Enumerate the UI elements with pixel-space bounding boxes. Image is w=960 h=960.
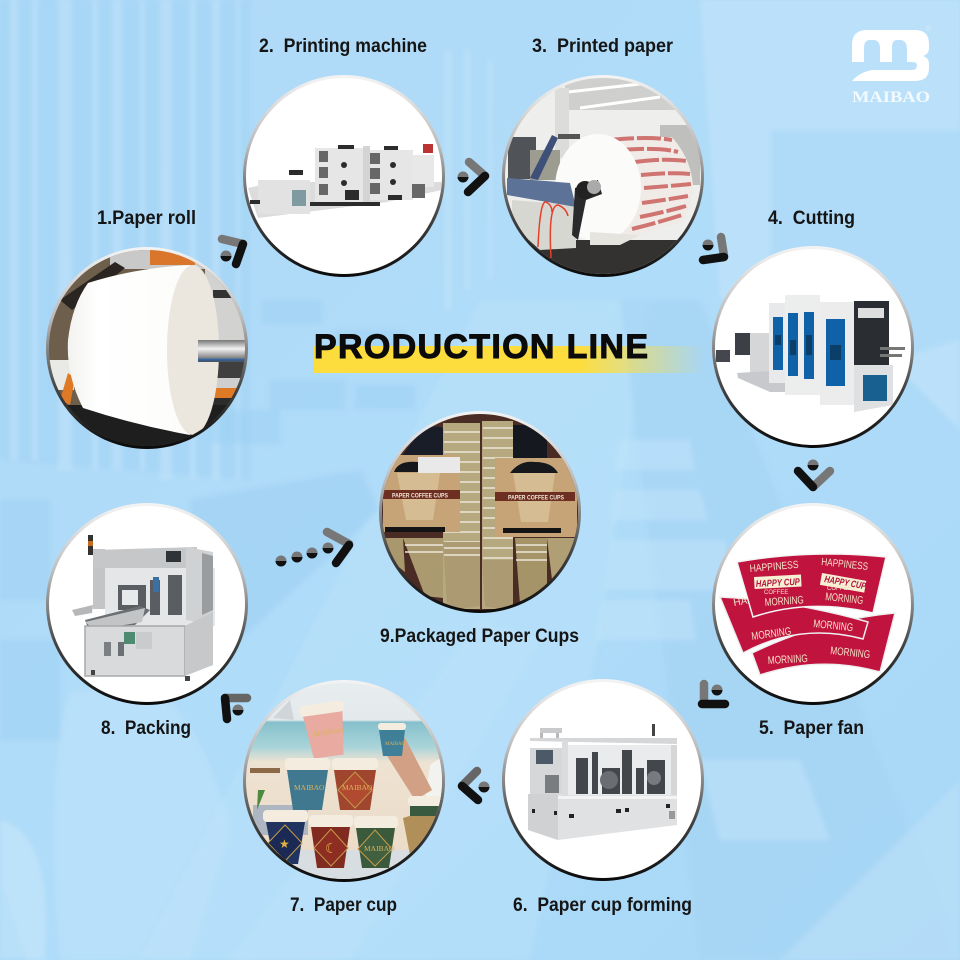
step 9: packaged paper cups — [378, 410, 582, 647]
step 5: paper fan: HAPPINESS — [749, 559, 799, 575]
step 2: printing machine: 2. Printing machine — [259, 36, 427, 57]
step 3: printed paper — [500, 36, 710, 282]
logo: MAIBAO — [852, 25, 932, 106]
step 5: paper fan: MORNING — [825, 591, 864, 607]
step 4: cutting — [708, 208, 918, 453]
arrow: 7 to 8 — [225, 698, 247, 719]
step 5: paper fan: COFFEE — [827, 586, 851, 592]
step 5: paper fan: HAPPY CUP — [756, 577, 801, 590]
step 5: paper fan: MORNING — [768, 653, 808, 667]
step 7: paper cup: 7. Paper cup — [290, 895, 397, 916]
step 5: paper fan: HA — [733, 596, 749, 609]
step 5: paper fan: MORNING — [813, 618, 854, 634]
step 1: paper roll: 1.Paper roll — [97, 208, 196, 229]
step 7: paper cup: MAIBAO — [342, 783, 373, 792]
step 3: printed paper: 3. Printed paper — [532, 36, 674, 57]
arrow: 3 to 4 — [702, 237, 724, 260]
logo: MAIBAO: ® — [926, 25, 932, 33]
arrow: 2 to 3 — [458, 162, 485, 192]
step 6: paper cup forming — [498, 676, 708, 916]
step 7: paper cup — [240, 678, 450, 916]
step 9: packaged paper cups: PAPER COFFEE CUPS — [508, 494, 565, 502]
step 9: packaged paper cups: 9.Packaged Paper Cups — [380, 626, 579, 647]
step 6: paper cup forming: 6. Paper cup forming — [513, 895, 692, 916]
step 8: packing — [42, 500, 252, 739]
step 7: paper cup: MAIBAO — [294, 783, 325, 792]
step 7: paper cup: ☾ — [325, 841, 338, 857]
step 5: paper fan: HAPPINESS — [821, 556, 869, 573]
step 7: paper cup: ★ — [279, 837, 290, 851]
step 7: paper cup: MAIBAO — [364, 844, 395, 853]
step 5: paper fan: MORNING — [751, 626, 792, 643]
step 8: packing: 8. Packing — [101, 718, 191, 739]
arrow: 1 to 2 — [220, 239, 243, 264]
step 2: printing machine — [240, 36, 450, 282]
arrow: 6 to 7 — [462, 771, 490, 800]
logo: MAIBAO: MAIBAO — [852, 89, 930, 106]
step 9: packaged paper cups: PAPER COFFEE CUPS — [392, 492, 449, 500]
step 5: paper fan: HAPPY CUP — [823, 574, 867, 592]
step 7: paper cup: MAIBAO — [385, 742, 406, 747]
arrow: 5 to 6 — [702, 684, 725, 704]
arrow: 8 to 9 — [276, 532, 349, 566]
step 5: paper fan: MORNING — [764, 594, 804, 609]
step 5: paper fan: 5. Paper fan — [759, 718, 864, 739]
step 4: cutting: 4. Cutting — [768, 208, 855, 229]
step 5: paper fan: MORNING — [830, 645, 871, 661]
title: production line: PRODUCTION LINE — [314, 328, 648, 366]
step 7: paper cup: MAIBAO — [313, 725, 345, 738]
step 5: paper fan — [708, 500, 918, 739]
step 5: paper fan: COFFEE — [764, 590, 788, 596]
step 1: paper roll — [46, 208, 253, 450]
arrow: 4 to 5 — [798, 460, 830, 487]
